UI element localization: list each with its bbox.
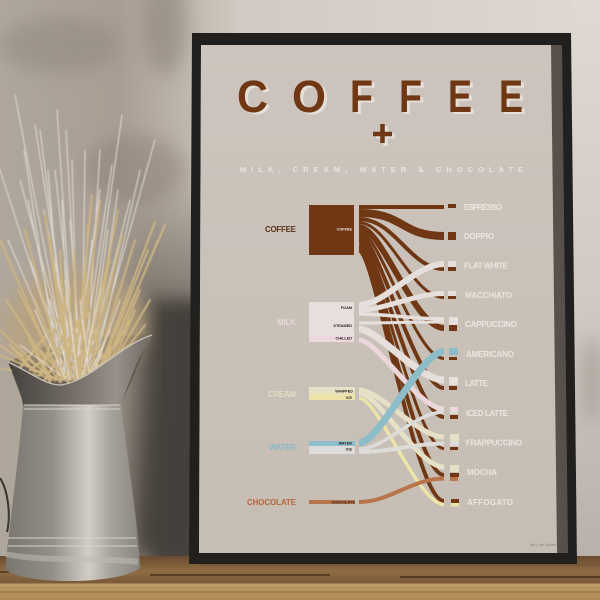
milk flows — [359, 264, 444, 380]
coffee box — [309, 205, 354, 255]
title: COFFEE: O — [292, 71, 326, 122]
category labels: WATER — [269, 443, 296, 452]
plus sign — [373, 124, 395, 146]
source box labels: FOAM — [341, 306, 352, 310]
category labels: CHOCOLATE — [247, 498, 297, 507]
milk box — [309, 302, 354, 342]
grass blades — [0, 95, 165, 384]
drink labels: FLAT WHITE — [464, 262, 509, 270]
jug handle — [0, 478, 9, 532]
chocolate flow — [359, 478, 444, 502]
source box labels: CHILLED — [336, 336, 352, 340]
title: COFFEE: C — [240, 73, 271, 124]
title: COFFEE: E — [499, 71, 523, 122]
drink labels: MOCHA — [467, 468, 497, 477]
drink labels: AFFOGATO — [467, 498, 513, 507]
source box labels: CHOCOLATE — [331, 500, 355, 504]
drink labels: ICED LATTE — [466, 409, 509, 418]
source box labels: ICE — [346, 396, 352, 400]
ice flows — [359, 412, 444, 452]
title: COFFEE: E — [448, 71, 472, 122]
category labels: COFFEE — [265, 225, 297, 234]
metal jug with dried grass — [0, 95, 165, 581]
source boxes — [309, 205, 355, 504]
subtitle: MILK, CREAM, WATER & CHOCOLATE — [240, 165, 523, 174]
grass mass — [3, 273, 147, 377]
coffee flows — [359, 207, 444, 501]
drink labels: FRAPPUCCINO — [466, 438, 522, 448]
title: COFFEE: E — [451, 73, 475, 124]
title: COFFEE: F — [353, 73, 376, 124]
title: COFFEE: F — [350, 71, 373, 122]
category labels: MILK — [277, 318, 296, 327]
category labels: CREAM — [268, 390, 296, 399]
source box labels: ICE — [346, 448, 352, 452]
chilled milk flow — [359, 340, 444, 409]
water flow — [359, 352, 444, 443]
title: COFFEE: O — [295, 73, 329, 124]
source box labels: WATER — [339, 442, 352, 446]
poster paper — [199, 45, 557, 553]
cream flows — [359, 390, 444, 504]
jug neck — [8, 336, 152, 405]
water box — [309, 441, 355, 446]
source box labels: COFFEE — [337, 228, 352, 232]
jug back rim — [8, 334, 152, 404]
drink labels: DOPPIO — [464, 232, 494, 241]
drink labels: LATTE — [465, 379, 489, 388]
sankey flows — [359, 207, 444, 504]
chocolate box — [309, 500, 355, 504]
source box labels: STEAMED — [333, 324, 352, 328]
title: COFFEE — [237, 71, 526, 124]
source box labels: WHIPPED — [335, 390, 353, 394]
drink labels: MACCHIATO — [465, 291, 512, 300]
source box labels — [331, 228, 355, 504]
picture frame — [189, 33, 577, 564]
drink labels: ESPRESSO — [464, 203, 502, 212]
title: COFFEE: E — [502, 73, 526, 124]
drink labels: CAPPUCCINO — [465, 320, 517, 329]
title: COFFEE: C — [237, 71, 268, 122]
drink labels: AMERICANO — [466, 350, 514, 359]
title: COFFEE: F — [402, 73, 425, 124]
cream box — [309, 387, 355, 394]
wooden shelf — [0, 556, 600, 600]
output swatches — [448, 204, 459, 506]
drink labels — [464, 203, 522, 507]
category labels — [247, 225, 297, 507]
title: COFFEE: F — [399, 71, 422, 122]
jug body — [5, 404, 140, 581]
signature: Tea | Ink Studio — [529, 542, 557, 547]
